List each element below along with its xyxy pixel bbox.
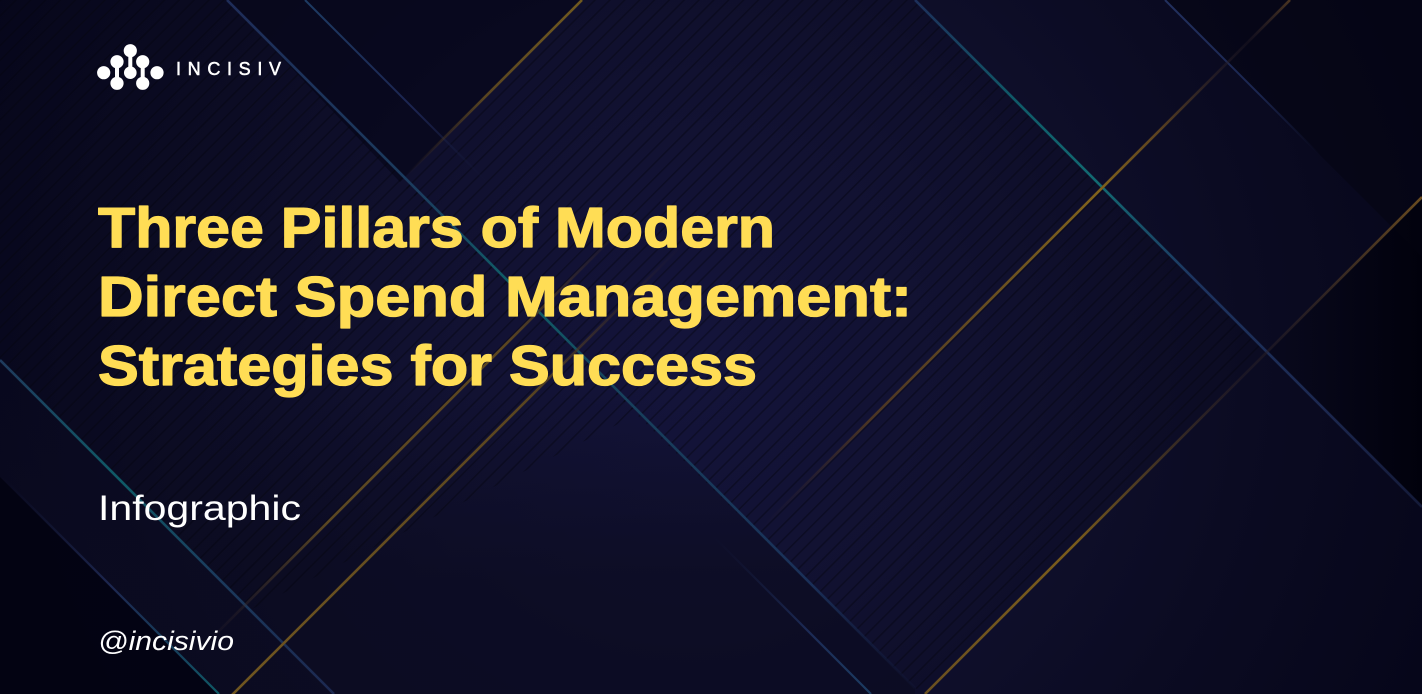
logo wordmark: INCISIV <box>176 59 281 79</box>
title: Direct Spend Management: <box>98 265 912 329</box>
title: Strategies for Success <box>98 334 757 398</box>
subtitle: Infographic <box>98 489 301 528</box>
title <box>98 196 912 398</box>
social handle: @incisivio <box>98 626 234 656</box>
icon: molecule logo mark <box>97 44 164 90</box>
logo <box>97 44 281 90</box>
title: Three Pillars of Modern <box>98 196 775 260</box>
